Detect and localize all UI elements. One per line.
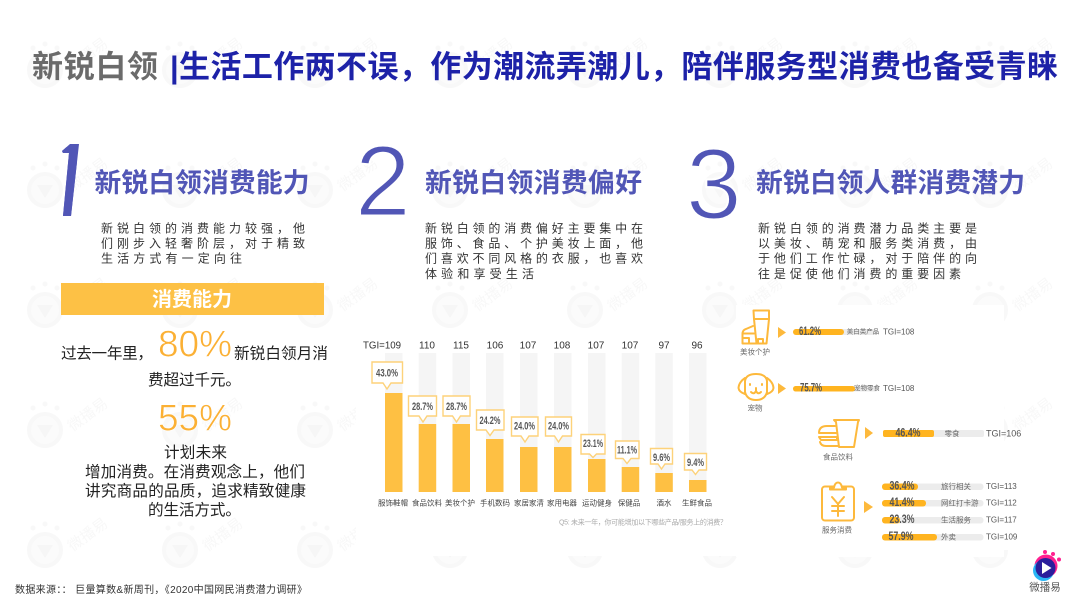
numeral 3: 3 [686,128,742,240]
stat: 80%: 80% [158,324,232,364]
service bars: TGI=112 [986,498,1017,508]
stat: 55%: 55% [158,398,232,438]
row: food and drink: 零食 [944,428,960,438]
value callouts: 11.1% [617,444,637,456]
value callouts: 23.1% [583,438,603,450]
stat: 55%: 计划未来 [164,444,227,462]
value callouts: 43.0% [376,368,398,380]
watermark pattern: 微播易 [335,155,381,195]
section 2 header [355,126,642,238]
watermark pattern: 微播易 [875,275,921,315]
banner: 消费能力 [152,288,232,311]
watermark pattern: 微播易 [335,395,381,435]
row: pets: TGI=108 [883,384,915,393]
service bars: 57.9% [888,531,914,543]
TGI row: 97 [658,340,670,352]
source note: 数据来源：： 巨量算数&新周刊，《2020中国网民消费潜力调研》 [15,583,307,596]
row: beauty: 美白类产品 [847,326,879,336]
watermark pattern: 微播易 [875,35,921,75]
stat: 80% [61,324,328,389]
section 3 description: 新锐白领的消费潜力品类主要是 [758,220,977,236]
TGI row: 108 [554,340,571,352]
stat: 55%: 讲究商品的品质，追求精致健康 [85,482,306,500]
numeral 2: 2 [355,126,411,238]
section 1 description: 们刚步入轻奢阶层，对于精致 [101,236,305,250]
category labels: 运动健身 [582,498,612,508]
icon: cosmetics [742,310,769,344]
section 3 description: 于他们工作忙碌，对于陪伴的向 [758,250,977,266]
survey question note: Q5: 未来一年，你可能增加以下哪些产品/服务上的消费？ [559,518,727,526]
watermark pattern: 微播易 [470,35,516,75]
bar tracks [385,353,706,492]
category labels: 服饰鞋帽 [378,498,408,508]
row: pets: 宠物 [748,402,763,412]
watermark pattern: 微播易 [335,515,381,555]
category labels: 家用电器 [547,498,577,508]
row: food and drink: 食品饮料 [823,452,853,462]
service bars: TGI=109 [986,532,1018,542]
stat: 80%: 新锐白领月消 [234,344,328,362]
watermark pattern: 微播易 [740,275,786,315]
category labels: 生鲜食品 [682,498,712,508]
watermark pattern: 微播易 [470,155,516,195]
numeral 1 [62,144,79,216]
watermark pattern: 微播易 [1010,395,1056,435]
numeral 1: 1 [40,126,96,238]
TGI row: 96 [691,340,703,352]
section 2 description: 体验和享受生活 [425,266,534,281]
watermark pattern: 微播易 [605,155,651,195]
category labels: 美妆个护 [445,498,475,508]
service bars [882,480,1018,543]
stat: 55% [85,398,306,519]
watermark pattern: 微播易 [335,275,381,315]
row: food and drink: 46.4% [896,428,920,440]
service bars: 网红打卡游 [941,498,979,508]
value callouts: 24.0% [514,420,535,432]
icon: food and drink [819,420,859,447]
watermark pattern: 微播易 [470,275,516,315]
section 2 description: 们喜欢不同风格的衣服，也喜欢 [425,250,643,266]
row: beauty: TGI=108 [883,328,915,336]
row: food and drink: TGI=106 [986,428,1021,438]
row: beauty: 61.2% [799,326,821,338]
value callouts: 28.7% [412,401,433,413]
watermark pattern: 微播易 [200,35,246,75]
watermark pattern: 微播易 [605,35,651,75]
section 3 header [686,128,1025,240]
watermark pattern: 微播易 [1010,275,1056,315]
stat: 80%: 费超过千元。 [148,371,241,389]
watermark pattern: 微播易 [335,35,381,75]
watermark pattern: 微播易 [200,155,246,195]
stat: 55%: 的生活方式。 [148,501,241,519]
value callouts: 28.7% [446,401,467,413]
section 3 description: 往是促使他们消费的重要因素 [758,266,961,281]
value callouts: 24.2% [480,415,501,427]
stat: 55%: 增加消费。在消费观念上，他们 [85,462,305,481]
service bars: TGI=117 [986,516,1017,524]
section 1 description: 生活方式有一定向往 [101,250,242,266]
value callouts: 24.0% [548,420,569,432]
section 1 description: 新锐白领的消费能力较强，他 [101,220,305,236]
TGI row [363,340,703,352]
TGI row: 115 [453,340,469,352]
section 2 description: 新锐白领的消费偏好主要集中在 [425,220,643,236]
row: beauty [740,310,915,356]
icon: bill with yuan sign [822,482,854,520]
row: pets: 75.7% [800,382,822,394]
watermark pattern: 微播易 [605,275,651,315]
watermark pattern: 微播易 [65,515,111,555]
TGI row: 107 [622,340,639,352]
watermark pattern: 微播易 [875,155,921,195]
service bars: TGI=113 [986,482,1017,491]
icon: dog [738,374,774,400]
category labels: 酒水 [656,498,672,508]
watermark pattern: 微播易 [740,155,786,195]
category labels [378,498,712,508]
section 2 description: 服饰、食品、个护美妆上面，他 [425,236,643,250]
row: pets: 宠物零食 [854,383,880,392]
service bars: 生活服务 [941,514,971,524]
watermark pattern: 微播易 [1010,155,1056,195]
service bars: 41.4% [890,497,914,509]
row: beauty: 美妆个护 [740,346,770,356]
row: pets [738,374,915,412]
stat: 80%: 过去一年里， [61,344,153,362]
watermark pattern: 微播易 [1010,35,1056,75]
section 2 header: 新锐白领消费偏好 [425,168,642,198]
watermark pattern: 微播易 [740,35,786,75]
section 3 header: 新锐白领人群消费潜力 [756,168,1025,198]
TGI row: 110 [419,340,435,352]
TGI row: 107 [520,340,537,352]
category labels: 食品饮料 [412,498,442,508]
row: services: 服务消费 [822,524,852,534]
category labels: 手机数码 [480,498,510,508]
section 3 description [758,220,977,281]
service bars: 旅行相关 [941,481,971,491]
bars [385,393,706,492]
watermark pattern: 微播易 [65,275,111,315]
value callouts: 9.4% [687,457,704,469]
section 1 header: 新锐白领消费能力 [94,168,310,198]
banner [61,283,324,315]
section 3 description: 以美妆、萌宠和服务类消费，由 [758,236,977,250]
watermark pattern: 微播易 [65,155,111,195]
category labels: 家居家清 [514,498,544,508]
service bars: 23.3% [890,514,914,526]
row: food and drink [819,420,1021,462]
title: 新锐白领 [32,50,158,84]
section 1 description [101,220,305,266]
section 2 description [425,220,643,281]
TGI row: TGI=109 [363,340,401,352]
watermark pattern: 微播易 [65,35,111,75]
panel: spending power [61,283,328,519]
watermark pattern: 微播易 [200,395,246,435]
title: | [170,50,179,84]
value callouts: 9.6% [653,452,670,464]
watermark pattern: 微播易 [65,395,111,435]
value callouts [372,362,706,474]
panel: potential categories [738,310,1021,543]
TGI row: 106 [487,340,504,352]
category labels: 保健品 [618,498,640,508]
section 1 header [62,144,308,216]
watermark pattern: 微播易 [200,275,246,315]
title: 生活工作两不误，作为潮流弄潮儿，陪伴服务型消费也备受青睐 [179,50,1058,84]
service bars: 36.4% [890,480,914,492]
row: services [822,480,1018,543]
service bars: 外卖 [941,532,956,542]
watermark pattern: 微播易 [200,515,246,555]
TGI row: 107 [588,340,605,352]
logo [1029,550,1061,594]
logo: 微播易 [1029,580,1061,594]
bar chart: consumption preferences [363,340,727,526]
